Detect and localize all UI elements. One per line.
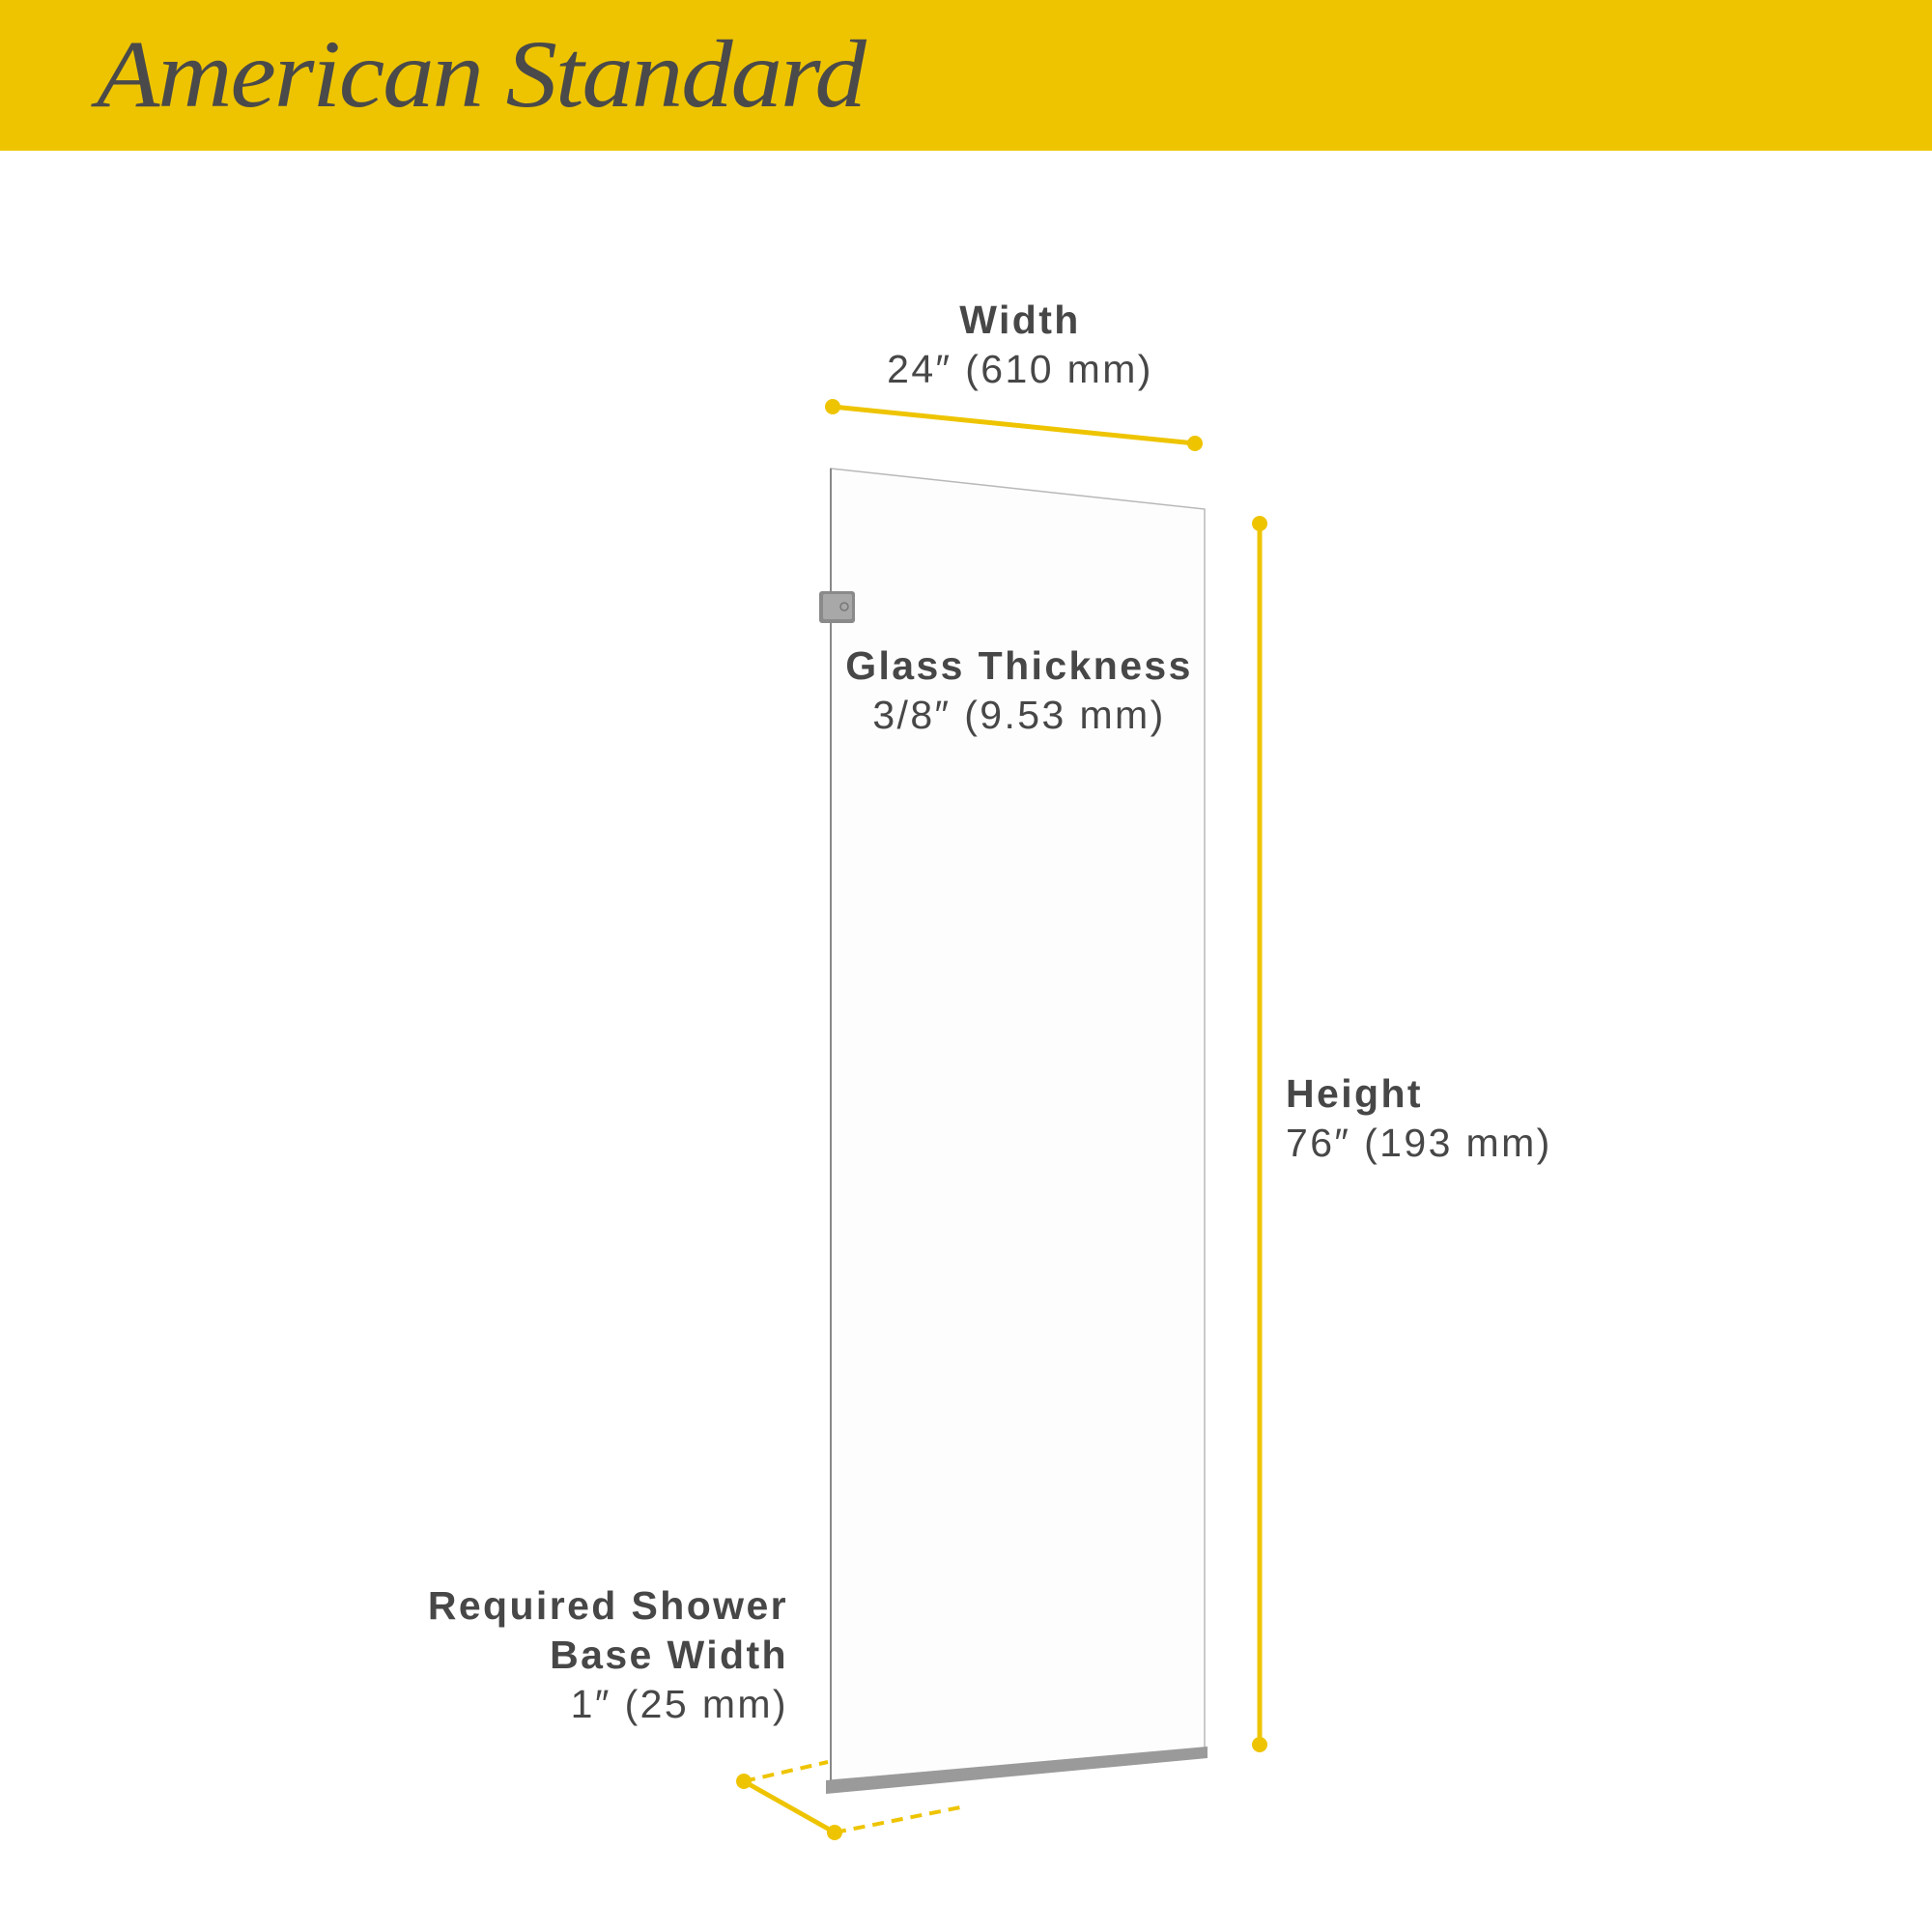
label: height <box>1286 1071 1552 1165</box>
label: width: 24″ (610 mm) <box>887 347 1153 391</box>
header bar <box>0 0 1932 151</box>
label: glass thickness: Glass Thickness <box>845 643 1193 688</box>
label: required shower base width: 1″ (25 mm) <box>571 1682 788 1726</box>
label: height: Height <box>1286 1071 1423 1116</box>
height dimension line <box>1252 516 1267 1752</box>
base width dimension <box>736 1762 965 1840</box>
label: required shower base width: Required Shower <box>428 1583 788 1628</box>
base rail <box>826 1747 1208 1794</box>
label: required shower base width <box>428 1583 788 1726</box>
glass panel <box>831 469 1205 1780</box>
label: glass thickness <box>845 643 1193 737</box>
label: glass thickness: 3/8″ (9.53 mm) <box>872 693 1166 737</box>
label: width <box>887 298 1153 391</box>
label: height: 76″ (193 mm) <box>1286 1121 1552 1165</box>
logo: American Standard: American Standard <box>97 20 865 128</box>
width dimension line <box>825 399 1203 451</box>
label: required shower base width: Base Width <box>550 1633 788 1677</box>
label: width: Width <box>959 298 1081 342</box>
hinge <box>819 591 855 623</box>
